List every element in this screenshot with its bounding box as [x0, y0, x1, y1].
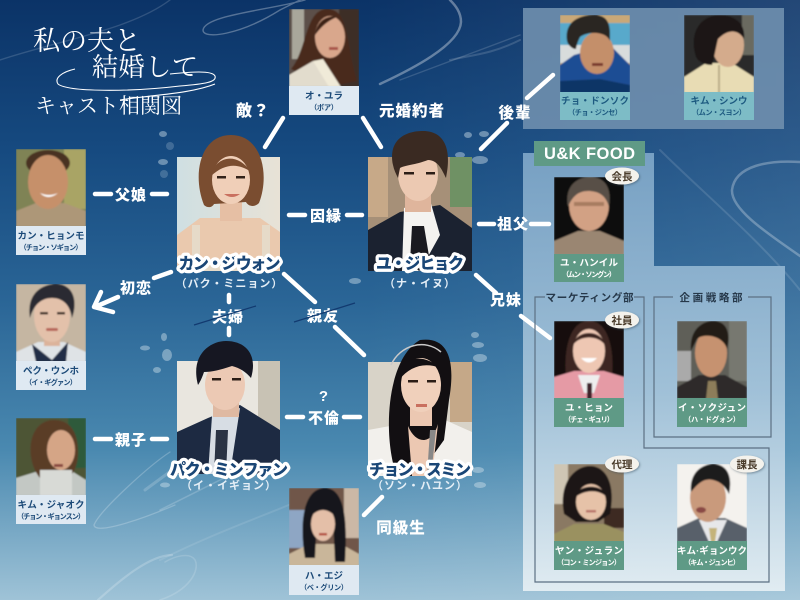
character: Yu Hee-yeon: ユ・ヒョン	[565, 403, 613, 414]
name: Jeong Su-min: チョン・スミン	[369, 461, 471, 479]
character: Ha Ye-ji	[289, 488, 359, 595]
arrow: first love	[94, 292, 118, 312]
character: Yu Hee-yeon	[554, 321, 624, 427]
character: Oh Yu-ra: オ・ユラ	[305, 91, 343, 102]
character: Kim Gyeong-uk: キム·ギョンウク	[677, 545, 747, 557]
character: Kim Gyeong-uk: （キム・ジュンヒ）	[684, 558, 740, 567]
relationship labels: 同級生	[376, 518, 426, 537]
character: Kim Shin-woo: キム・シンウ	[690, 96, 748, 107]
character: Kang Hyeon-mo: （チョン・ソギョン）	[20, 243, 82, 252]
relationship labels	[115, 101, 532, 537]
character: Ha Ye-ji: ハ・エジ	[305, 571, 343, 582]
relationship labels: 元婚約者	[379, 101, 445, 120]
character: Kim Shin-woo: （ムン・スヨン）	[692, 108, 746, 117]
character: Yu Han-il: ユ・ハンイル	[560, 258, 618, 269]
role badges: 代理	[612, 459, 633, 471]
relationship labels: 親友	[307, 307, 339, 325]
character: Yang Ju-ran: （コン・ミンジョン）	[557, 558, 621, 567]
splash decorations	[140, 131, 489, 488]
actor: Na In-woo: （ナ・イヌ）	[384, 277, 456, 290]
main character: Yu Ji-hyeok	[368, 131, 472, 290]
character: Lee Seok-jun: （ハ・ドグォン）	[684, 415, 740, 424]
name: Park Min-hwan: パク・ミンファン	[170, 461, 288, 479]
relationship labels: ?	[319, 388, 329, 405]
relationship labels: 父娘	[115, 186, 147, 204]
character: Yu Han-il	[554, 177, 624, 282]
character: Ha Ye-ji: （ベ・グリン）	[300, 583, 348, 592]
panel: juniors	[523, 8, 784, 129]
character: Kang Hyeon-mo: カン・ヒョンモ	[18, 231, 84, 242]
main character: Kang Ji-won	[176, 135, 283, 290]
actor: Lee Yi-kyung: （イ・イギョン）	[181, 479, 277, 492]
character: Lee Seok-jun	[677, 321, 747, 427]
character: Kim Ja-ok: （チョン・ギョンスン）	[17, 512, 85, 521]
role badges	[605, 168, 764, 472]
relationship labels: 祖父	[497, 216, 529, 233]
role badges: 社員	[612, 314, 633, 327]
department frame: marketing	[535, 291, 769, 582]
relationship labels: 後輩	[498, 103, 532, 122]
name: Kang Ji-won: カン・ジウォン	[178, 255, 280, 273]
title: キャスト相関図	[35, 94, 182, 118]
name: Yu Ji-hyeok: ユ・ジヒョク	[376, 255, 464, 273]
relationship labels: 兄妹	[490, 291, 522, 309]
character: Kim Gyeong-uk	[677, 464, 747, 570]
relationship labels: 敵？	[236, 101, 270, 120]
relationship labels: 初恋	[120, 279, 152, 297]
character: Baek Eun-ho	[16, 284, 86, 390]
character: Kim Ja-ok	[16, 418, 86, 524]
role badges: 会長	[612, 170, 633, 183]
character: Kang Hyeon-mo	[16, 149, 86, 255]
actor: Song Ha-yoon: （ソン・ハユン）	[372, 479, 468, 492]
character: Oh Yu-ra: （ボア）	[310, 103, 338, 112]
character: Lee Seok-jun: イ・ソクジュン	[678, 403, 746, 414]
character: Baek Eun-ho: （イ・ギグァン）	[25, 378, 77, 387]
character: Jo Dong-seok	[560, 15, 630, 120]
relationship labels: 親子	[115, 432, 147, 449]
title	[33, 26, 215, 118]
panel: U&K FOOD	[523, 153, 785, 591]
character: Oh Yu-ra	[289, 9, 359, 115]
character: Kim Shin-woo	[684, 15, 754, 120]
relationship labels: 夫婦	[212, 308, 244, 326]
character: Yang Ju-ran: ヤン・ジュラン	[555, 546, 623, 557]
character: Kim Ja-ok: キム・ジャオク	[18, 500, 84, 511]
department frame: strategy	[654, 291, 771, 437]
role badges: 課長	[736, 459, 758, 471]
main character: Jeong Su-min	[368, 340, 472, 492]
character: Jo Dong-seok: チョ・ドンソク	[561, 96, 629, 107]
character: Jo Dong-seok: （チョ・ジンセ）	[568, 108, 622, 117]
heading: U&K FOOD tab: U&K FOOD	[544, 145, 635, 163]
character: Yu Han-il: （ムン・ソングン）	[562, 270, 616, 279]
main character: Park Min-hwan	[170, 341, 288, 492]
title: 私の夫と	[33, 26, 141, 56]
character: Baek Eun-ho: ペク・ウンホ	[23, 366, 79, 377]
department frame: marketing: マーケティング部	[546, 291, 634, 304]
relationship lines	[95, 75, 553, 515]
heading: U&K FOOD tab	[534, 141, 645, 166]
department frame: strategy: 企画戦略部	[680, 291, 743, 304]
character: Yang Ju-ran	[554, 464, 624, 570]
character: Yu Hee-yeon: （チェ・ギュリ）	[564, 415, 614, 424]
title: 結婚して	[92, 53, 198, 82]
relationship labels: 不倫	[308, 409, 340, 427]
relationship labels: 因縁	[310, 207, 342, 225]
actor: Park Min-young: （パク・ミニョン）	[176, 277, 283, 290]
